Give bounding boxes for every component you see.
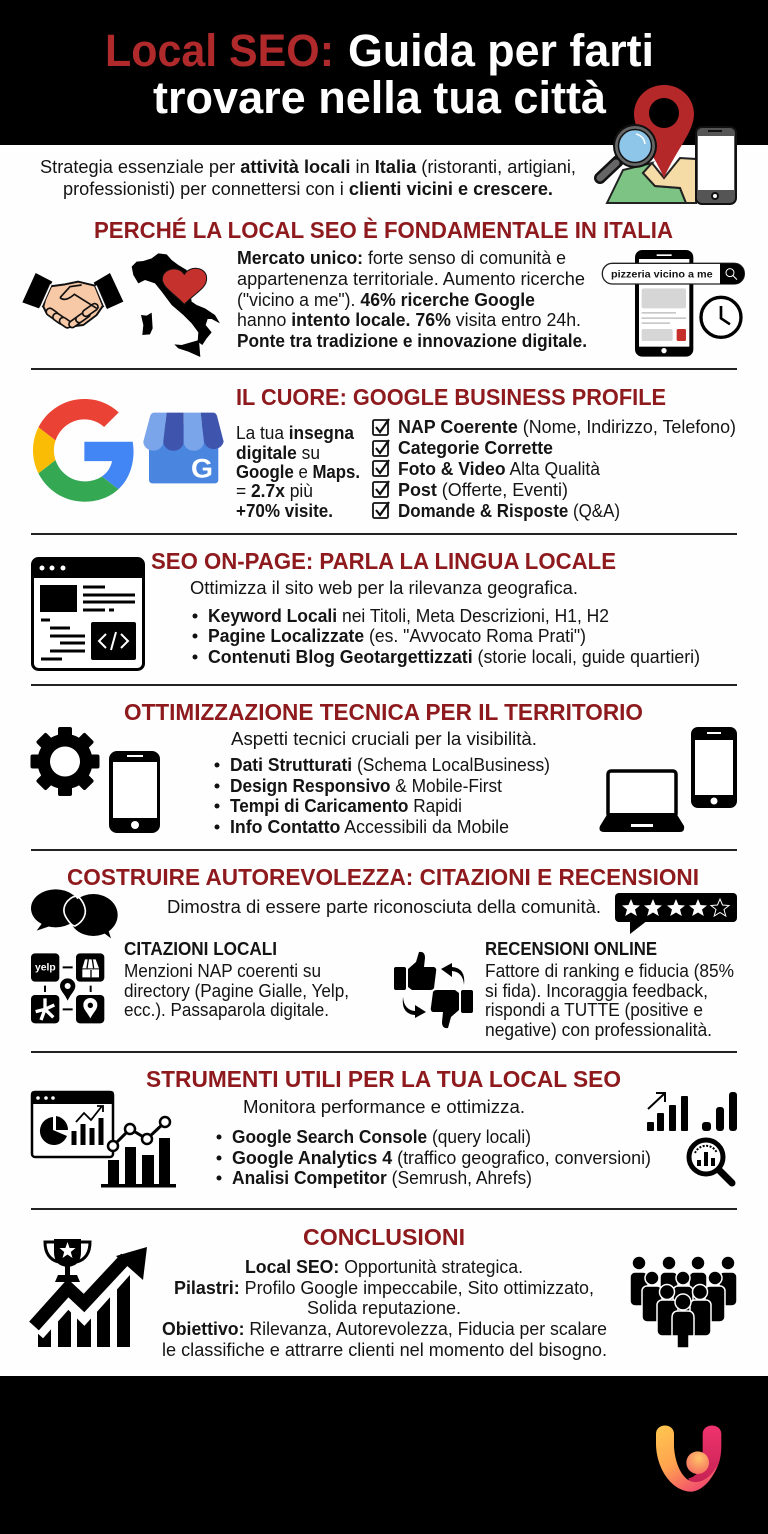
text: recensioni online: rispondi a TUTTE (positive e xyxy=(485,999,703,1020)
heading: ottimizzazione tecnica: OTTIMIZZAZIONE TECNICA PER IL TERRITORIO xyxy=(124,699,643,725)
check item 4: Post (Offerte, Eventi) xyxy=(398,479,568,500)
text: recensioni online: Fattore di ranking e fiducia (85% xyxy=(485,960,734,981)
title: Guida per farti xyxy=(348,25,654,76)
icon: phone search and clock xyxy=(602,250,744,357)
icon: Google Business store: G xyxy=(191,453,213,483)
text: mercato unico: Ponte tra tradizione e innovazione digitale. xyxy=(237,330,587,351)
icon: laptop and phone xyxy=(600,727,737,832)
bullet list: strumenti: Google Search Console (query locali) xyxy=(232,1126,531,1147)
check item 5: Domande & Risposte (Q&A) xyxy=(398,500,620,521)
icon: phone left xyxy=(109,751,160,833)
text: aspetti tecnici: Aspetti tecnici cruciali per la visibilità. xyxy=(231,728,537,749)
text: mercato unico: appartenenza territoriale. Aumento ricerche xyxy=(237,268,585,289)
icon: phone search and clock: pizzeria vicino a me xyxy=(611,270,713,281)
heading: strumenti: STRUMENTI UTILI PER LA TUA LOCAL SEO xyxy=(146,1066,621,1092)
bullet list: seo on-page: Pagine Localizzate (es. "Avvocato Roma Prati") xyxy=(208,625,586,646)
checklist xyxy=(373,416,736,521)
text: mercato unico: hanno intento locale. 76% visita entro 24h. xyxy=(237,309,581,330)
divider xyxy=(31,1051,737,1053)
heading: conclusioni: CONCLUSIONI xyxy=(303,1224,465,1250)
text: mercato unico: Mercato unico: forte senso di comunità e xyxy=(237,247,566,268)
icon: browser code window xyxy=(32,558,144,670)
text: recensioni online xyxy=(485,938,734,1040)
text: conclusioni xyxy=(162,1256,607,1360)
heading: seo on-page: SEO ON-PAGE: PARLA LA LINGUA LOCALE xyxy=(151,548,616,574)
text: citazioni locali: CITAZIONI LOCALI xyxy=(124,938,277,959)
bullet list: strumenti: Google Analytics 4 (traffico geografico, conversioni) xyxy=(232,1147,651,1168)
text: conclusioni: Obiettivo: Rilevanza, Autorevolezza, Fiducia per scalare xyxy=(162,1318,607,1339)
text: citazioni locali: ecc.). Passaparola digitale. xyxy=(124,999,329,1020)
text: ottimizza: Ottimizza il sito web per la rilevanza geografica. xyxy=(190,577,578,598)
icon: citations directory network xyxy=(31,953,104,1023)
header band xyxy=(0,0,768,145)
divider xyxy=(31,1208,737,1210)
bullet list: strumenti: Analisi Competitor (Semrush, Ahrefs) xyxy=(232,1167,532,1188)
divider xyxy=(31,849,737,851)
heading: google business profile: IL CUORE: GOOGLE BUSINESS PROFILE xyxy=(236,384,666,410)
icon: speech bubbles xyxy=(31,889,118,938)
check item 3: Foto & Video Alta Qualità xyxy=(398,458,601,479)
bullet list: tecnica: Dati Strutturati (Schema LocalBusiness) xyxy=(230,754,550,775)
icon: Google Business store xyxy=(143,413,224,483)
text: conclusioni: Pilastri: Profilo Google impeccabile, Sito ottimizzato, xyxy=(174,1277,594,1298)
text: recensioni online: si fida). Incoraggia feedback, xyxy=(485,980,708,1001)
bullet list: tecnica xyxy=(214,754,550,837)
heading: autorevolezza: COSTRUIRE AUTOREVOLEZZA: CITAZIONI E RECENSIONI xyxy=(67,864,699,890)
text: dimostra: Dimostra di essere parte riconosciuta della comunità. xyxy=(167,896,601,917)
text: recensioni online: negative) con professionalità. xyxy=(485,1019,712,1040)
bullet list: strumenti xyxy=(216,1126,651,1188)
bullet list: tecnica: Info Contatto Accessibili da Mobile xyxy=(230,816,509,837)
icon: handshake xyxy=(22,273,123,329)
icon: analytics dashboard xyxy=(31,1091,176,1188)
check item 2: Categorie Corrette xyxy=(398,437,553,458)
text: citazioni locali: directory (Pagine Gialle, Yelp, xyxy=(124,980,349,1001)
title xyxy=(105,25,654,123)
text: conclusioni: Solida reputazione. xyxy=(307,1297,461,1318)
icon: star rating bubble xyxy=(615,893,737,934)
text: conclusioni: le classifiche e attrarre clienti nel momento del bisogno. xyxy=(162,1339,607,1360)
icon: growth chart arrow xyxy=(34,1247,147,1347)
text: citazioni locali: Menzioni NAP coerenti su xyxy=(124,960,321,981)
divider xyxy=(31,684,737,686)
text: monitora: Monitora performance e ottimizza. xyxy=(243,1096,525,1117)
text: conclusioni: Local SEO: Opportunità strategica. xyxy=(245,1256,523,1277)
icon: Google logo xyxy=(33,399,134,502)
text: insegna digitale xyxy=(236,422,360,521)
divider xyxy=(31,368,737,370)
heading: perché: PERCHÉ LA LOCAL SEO È FONDAMENTALE IN ITALIA xyxy=(94,216,673,243)
title: trovare nella tua città xyxy=(153,72,607,123)
icon: Italy map with heart xyxy=(132,253,220,357)
bullet list: seo on-page xyxy=(192,605,700,667)
icon: map, pin, magnifier and phone xyxy=(600,85,736,204)
text: mercato unico xyxy=(237,247,587,351)
icon: gear xyxy=(30,727,100,796)
footer band xyxy=(0,1376,768,1534)
icon: thumbs up and down xyxy=(394,952,473,1028)
bullet list: tecnica: Tempi di Caricamento Rapidi xyxy=(230,795,462,816)
text: recensioni online: RECENSIONI ONLINE xyxy=(485,938,657,959)
subtitle: professionisti) per connettersi con i clienti vicini e crescere. xyxy=(63,178,553,199)
text: insegna digitale: digitale su xyxy=(236,442,320,463)
icon: citations directory network: yelp xyxy=(35,963,56,974)
subtitle xyxy=(40,156,576,199)
icon: trophy xyxy=(45,1239,90,1282)
text: insegna digitale: = 2.7x più xyxy=(236,480,313,501)
text: insegna digitale: La tua insegna xyxy=(236,422,354,443)
bullet list: seo on-page: Keyword Locali nei Titoli, Meta Descrizioni, H1, H2 xyxy=(208,605,609,626)
text: mercato unico: ("vicino a me"). 46% ricerche Google xyxy=(237,289,535,310)
icon: crowd of people xyxy=(630,1256,737,1348)
title: Local SEO: xyxy=(105,25,334,76)
logo xyxy=(656,1425,721,1492)
text: insegna digitale: Google e Maps. xyxy=(236,461,360,482)
text: insegna digitale: +70% visite. xyxy=(236,500,333,521)
check item 1: NAP Coerente (Nome, Indirizzo, Telefono) xyxy=(398,416,736,437)
bullet list: tecnica: Design Responsivo & Mobile-First xyxy=(230,775,503,796)
text: citazioni locali xyxy=(124,938,349,1020)
icon: bar charts and magnifier xyxy=(647,1092,737,1183)
subtitle: Strategia essenziale per attività locali in Italia (ristoranti, artigiani, xyxy=(40,156,576,177)
divider xyxy=(31,533,737,535)
bullet list: seo on-page: Contenuti Blog Geotargettizzati (storie locali, guide quartieri) xyxy=(208,646,700,667)
